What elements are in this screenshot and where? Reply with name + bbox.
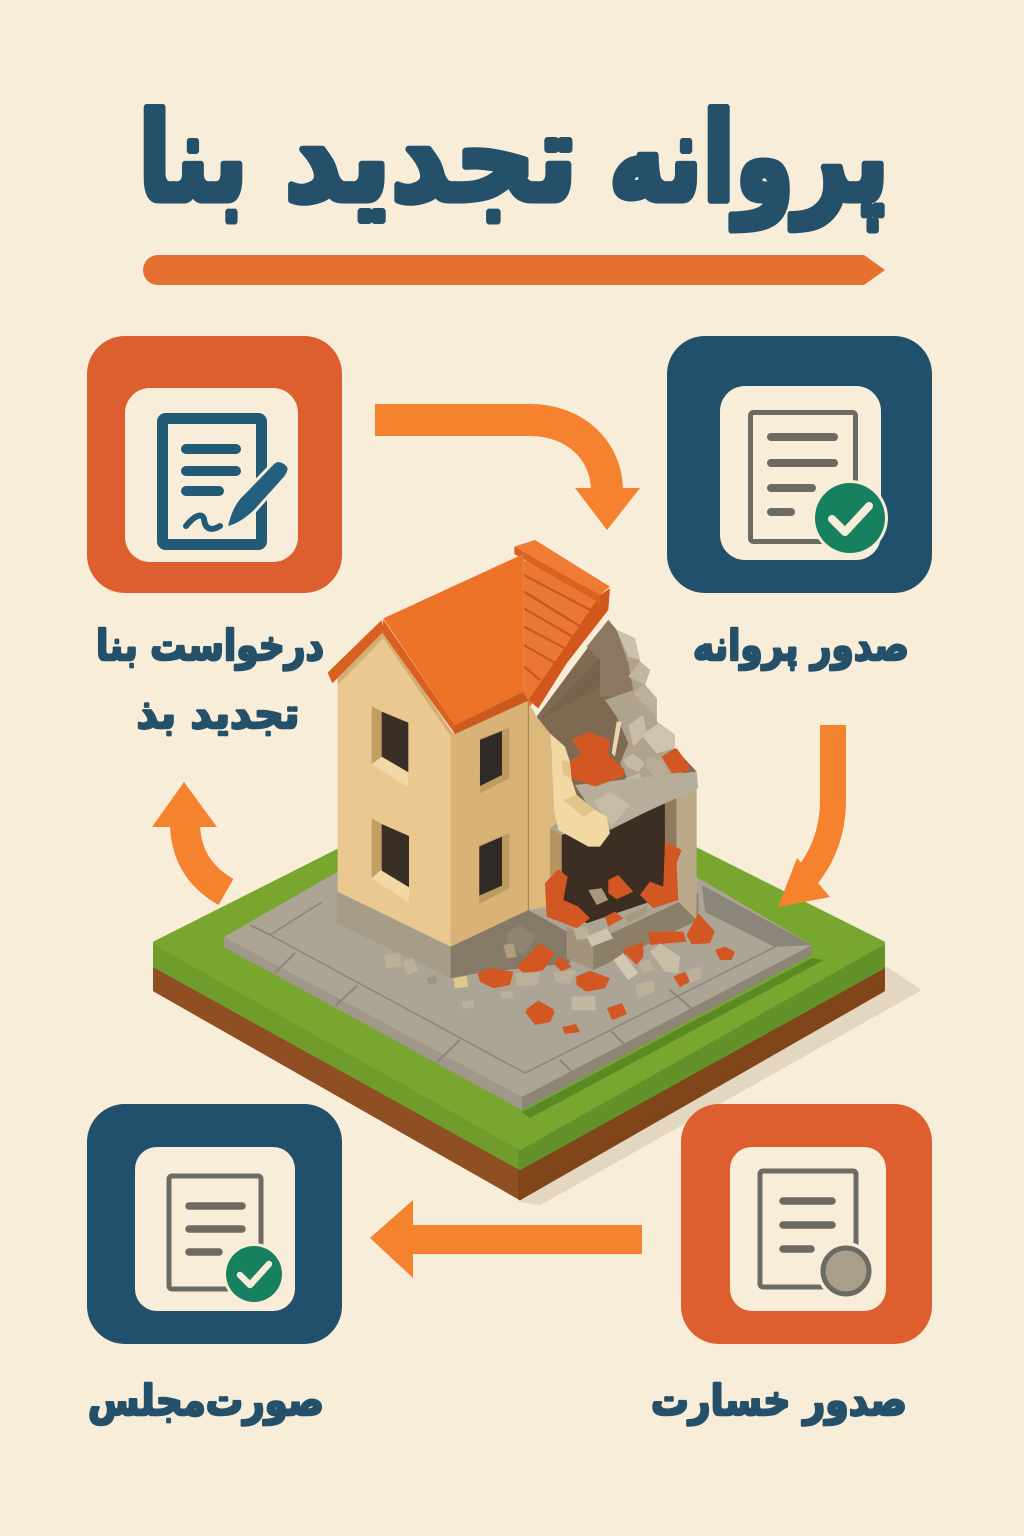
label: minutes: صورت‌مجلس	[88, 1376, 324, 1426]
slab and pier	[575, 772, 698, 920]
label: permit: صدور پروانه	[693, 621, 909, 671]
paving	[224, 770, 812, 1110]
loose bricks on pavement	[525, 1002, 627, 1034]
panel: permit issue	[667, 336, 932, 593]
low wall of garage	[567, 893, 698, 970]
roof	[328, 540, 610, 734]
arrow: damage to minutes	[370, 1200, 642, 1278]
base	[337, 892, 451, 978]
icon: document with pen	[162, 418, 289, 544]
arrow: permit to damage	[778, 725, 833, 907]
title: پروانه	[609, 87, 889, 230]
broken interior	[537, 620, 697, 827]
left windows	[372, 706, 409, 903]
panel: minutes	[87, 1104, 342, 1344]
broken front wall	[550, 733, 610, 847]
label: application: تجدید بذ	[136, 689, 300, 738]
title: بنا	[138, 87, 248, 229]
left wall	[338, 628, 453, 947]
panel: damage issue	[681, 1104, 932, 1344]
label: application	[96, 621, 324, 738]
title	[138, 87, 889, 230]
platform block	[155, 760, 883, 1198]
arrow: minutes to application	[152, 782, 226, 892]
arrow: application to permit	[375, 420, 640, 530]
icon: document with green check	[750, 412, 888, 556]
right windows	[479, 728, 509, 904]
stone rubble	[385, 888, 702, 1010]
house	[328, 540, 735, 1010]
icon: document with seal	[760, 1171, 875, 1300]
title: تجدید	[284, 87, 578, 229]
title underline arrow	[143, 255, 885, 285]
garage opening	[562, 803, 665, 923]
panel: application	[87, 336, 342, 593]
orange rubble	[478, 732, 735, 1010]
label: damage: صدور خسارت	[651, 1376, 907, 1426]
eave shadow	[338, 628, 453, 740]
platform shadow	[520, 968, 918, 1203]
illustration: damaged house on platform	[155, 540, 918, 1203]
right wall	[451, 698, 528, 947]
label: application: درخواست بنا	[96, 621, 324, 671]
icon: document with green check	[169, 1176, 285, 1305]
